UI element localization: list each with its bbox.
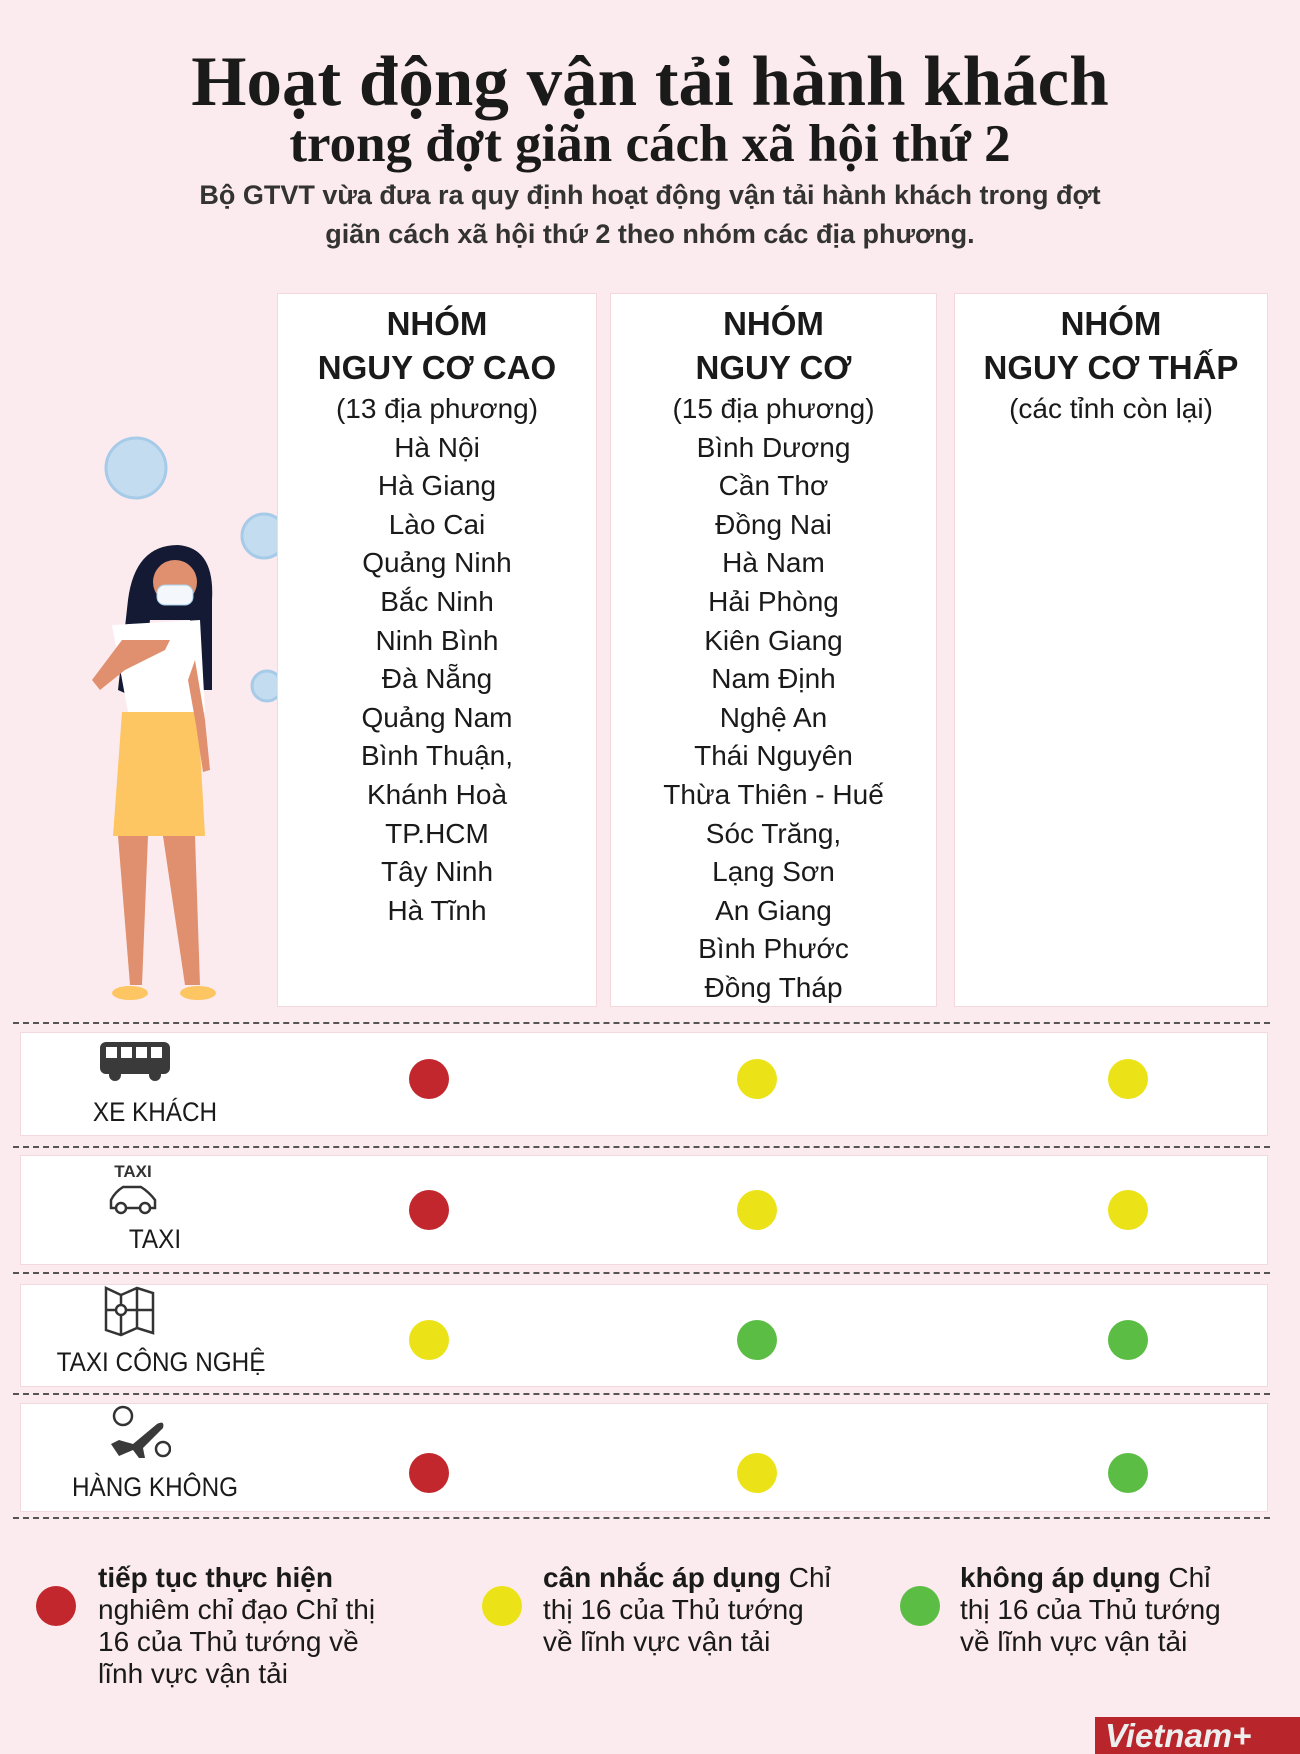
panel: low risk: NHÓM	[1061, 305, 1161, 342]
row: taxi	[20, 1155, 1268, 1265]
panel: risk: Hà Nam	[722, 547, 825, 578]
logo: Vietnam+: Vietnam+	[1105, 1717, 1251, 1754]
panel: risk: Kiên Giang	[704, 625, 843, 656]
panel: high risk: Hà Tĩnh	[387, 895, 487, 926]
panel: risk: Cần Thơ	[719, 470, 828, 501]
panel: risk: Hải Phòng	[708, 586, 839, 617]
panel: high risk: Bình Thuận,	[361, 740, 513, 771]
panel: risk: Đồng Tháp	[704, 972, 843, 1003]
panel: high risk: NHÓM	[387, 305, 487, 342]
panel: high risk: (13 địa phương)	[336, 393, 538, 424]
legend: green: không áp dụng Chỉ thị 16 của Thủ tướng về lĩnh vực vận tải	[960, 1562, 1221, 1657]
panel: high risk: Đà Nẵng	[382, 663, 492, 694]
row: taxi: TAXI	[129, 1224, 181, 1254]
row: xe khach: XE KHÁCH	[93, 1097, 217, 1127]
panel: low risk: (các tỉnh còn lại)	[1009, 393, 1213, 424]
subtitle heading: trong đợt giãn cách xã hội thứ 2	[289, 115, 1011, 173]
row: taxi cong nghe	[20, 1284, 1268, 1387]
panel: high risk	[277, 293, 597, 1007]
row: xe khach	[20, 1032, 1268, 1136]
row: hang khong	[20, 1403, 1268, 1512]
panel: high risk: NGUY CƠ CAO	[318, 349, 556, 386]
panel: risk: Bình Dương	[697, 432, 850, 463]
panel: high risk: Lào Cai	[389, 509, 485, 540]
panel: risk: Sóc Trăng,	[706, 818, 841, 849]
legend: red: tiếp tục thực hiện nghiêm chỉ đạo Chỉ thị 16 của Thủ tướng về lĩnh vực vận tải	[98, 1562, 375, 1689]
panel: high risk: Hà Giang	[378, 470, 496, 501]
icon: taxi	[110, 1162, 156, 1214]
title: Hoạt động vận tải hành khách	[191, 43, 1109, 121]
illustration: woman with mask and viruses	[92, 436, 277, 1000]
intro text: Bộ GTVT vừa đưa ra quy định hoạt động vận tải hành khách trong đợt giãn cách xã hội thứ 2 theo nhóm các địa phương.	[199, 180, 1101, 249]
panel: risk: Nghệ An	[720, 702, 827, 733]
panel: risk	[610, 293, 937, 1007]
panel: risk: Nam Định	[711, 663, 836, 694]
icon: map	[104, 1286, 154, 1336]
panel: high risk: Khánh Hoà	[367, 779, 507, 810]
panel: high risk: Quảng Nam	[362, 702, 512, 733]
icon: taxi: TAXI	[114, 1162, 152, 1181]
virus icon in middle panel	[622, 435, 702, 555]
icon: bus	[100, 1042, 170, 1081]
panel: risk: An Giang	[715, 895, 832, 926]
panel: risk: Bình Phước	[698, 933, 849, 964]
panel: risk: (15 địa phương)	[672, 393, 875, 424]
panel: high risk: Tây Ninh	[381, 856, 493, 887]
panel: high risk: TP.HCM	[385, 818, 489, 849]
panel: high risk: Quảng Ninh	[362, 547, 512, 578]
panel: risk: NGUY CƠ	[696, 349, 851, 386]
panel: risk: NHÓM	[723, 305, 824, 342]
panel: low risk	[954, 293, 1268, 1007]
panel: high risk: Bắc Ninh	[380, 586, 494, 617]
panel: risk: Lạng Sơn	[712, 856, 835, 887]
row: taxi cong nghe: TAXI CÔNG NGHỆ	[57, 1347, 265, 1377]
icon: plane	[111, 1406, 171, 1458]
panel: risk: Thái Nguyên	[694, 740, 853, 771]
panel: risk: Đồng Nai	[715, 509, 832, 540]
panel: high risk: Ninh Bình	[376, 625, 498, 656]
panel: high risk: Hà Nội	[394, 432, 480, 463]
row: hang khong: HÀNG KHÔNG	[72, 1472, 238, 1502]
panel: low risk: NGUY CƠ THẤP	[984, 349, 1238, 386]
panel: risk: Thừa Thiên - Huế	[663, 779, 884, 810]
legend: yellow: cân nhắc áp dụng Chỉ thị 16 của Thủ tướng về lĩnh vực vận tải	[543, 1562, 831, 1657]
